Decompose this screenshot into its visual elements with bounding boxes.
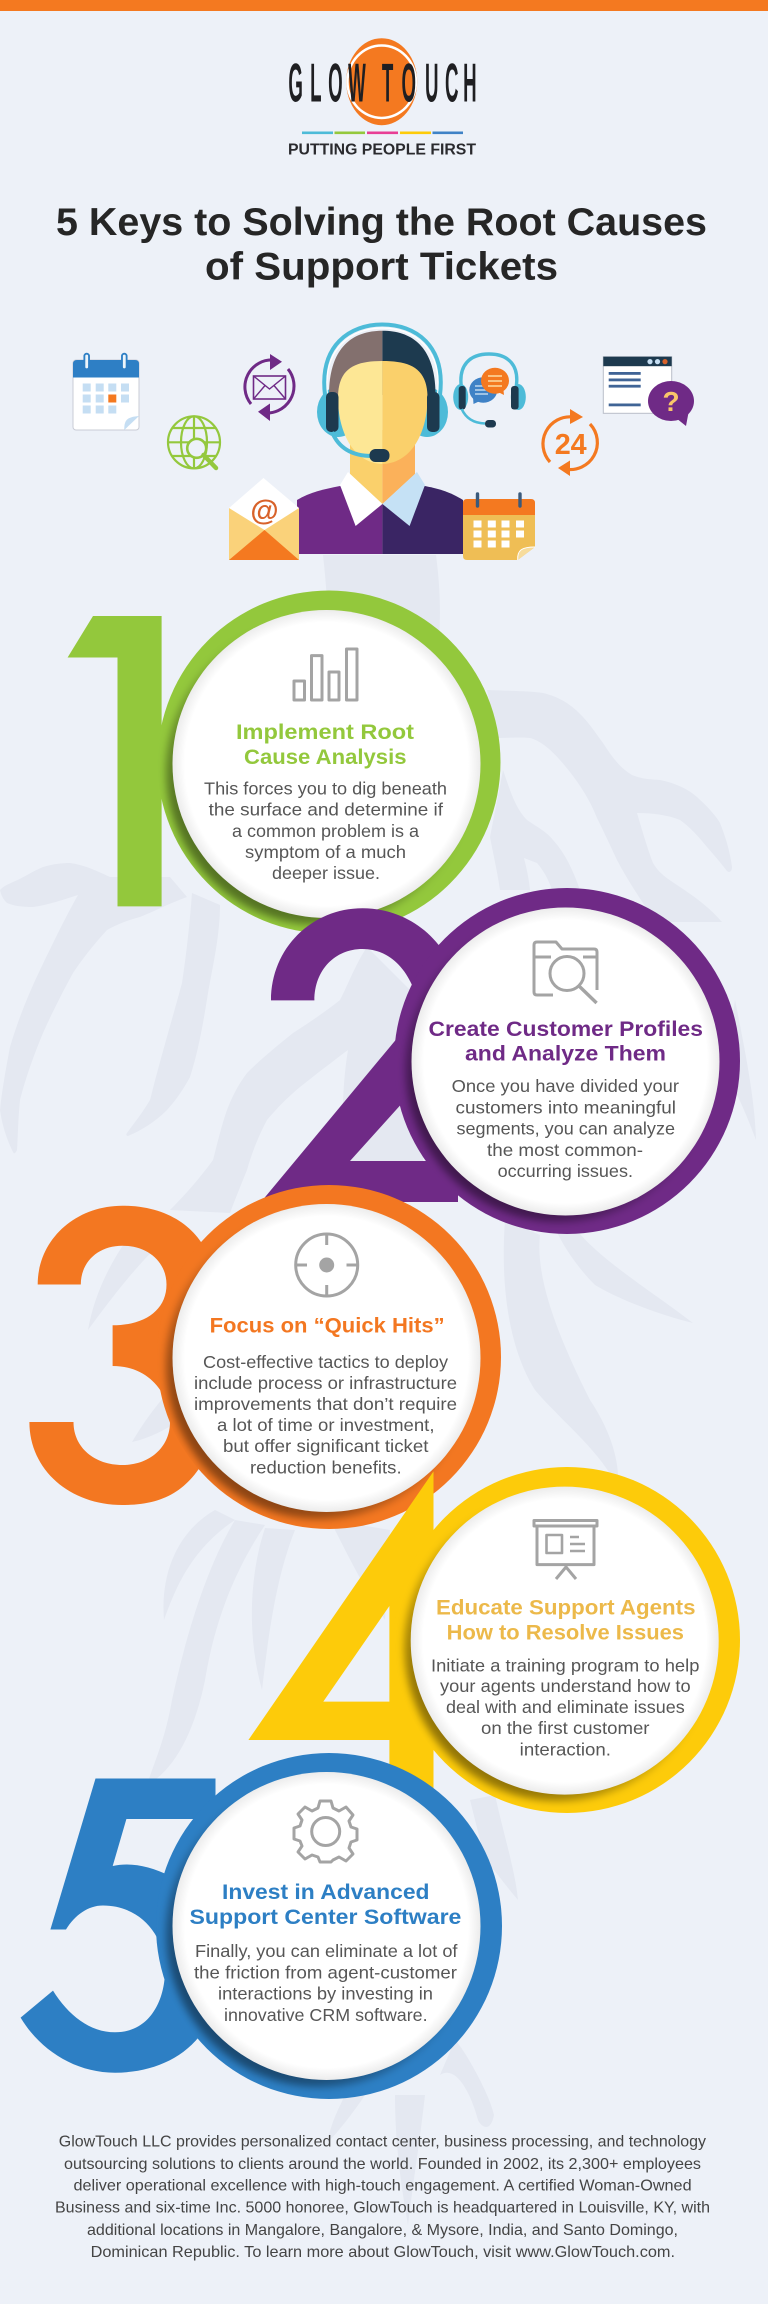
big numeral 1 bbox=[68, 616, 162, 906]
footer text: GlowTouch LLC provides personalized contact center, business processing, and technology bbox=[59, 2134, 706, 2150]
footer text bbox=[55, 2134, 710, 2261]
heading: Invest in Advanced bbox=[222, 1880, 430, 1904]
footer text: outsourcing solutions to clients around the world. Founded in 2002, its 2,300+ employees bbox=[64, 2156, 701, 2173]
big numeral 2 bbox=[261, 908, 470, 1202]
logo emblem bbox=[346, 38, 417, 125]
background roots illustration bbox=[0, 555, 756, 2225]
person with headset bbox=[297, 324, 463, 554]
icon: right calendar bbox=[463, 494, 535, 560]
body text: on the first customer bbox=[481, 1718, 650, 1738]
body text: customers into meaningful bbox=[456, 1098, 676, 1118]
footer text: Business and six-time Inc. 5000 honoree, GlowTouch is headquartered in Louisville, KY, with bbox=[55, 2200, 710, 2217]
logo wordmark: GLOWTOUCH bbox=[288, 52, 477, 114]
icon: headset with chat bubbles bbox=[453, 354, 526, 428]
tagline: PUTTING PEOPLE FIRST bbox=[288, 141, 477, 158]
icon: envelope with at sign bbox=[229, 478, 299, 560]
body text: a lot of time or investment, bbox=[217, 1415, 434, 1435]
icon: browser window with question bubble bbox=[603, 357, 694, 426]
body text: Once you have divided your bbox=[452, 1076, 679, 1096]
body text: include process or infrastructure bbox=[194, 1373, 457, 1393]
body text: Initiate a training program to help bbox=[431, 1655, 699, 1675]
heading: Cause Analysis bbox=[244, 745, 407, 769]
title bbox=[56, 201, 707, 288]
body text: interaction. bbox=[520, 1740, 611, 1760]
body text: deal with and eliminate issues bbox=[446, 1697, 685, 1717]
big numeral 3 bbox=[29, 1206, 210, 1505]
body text bbox=[204, 779, 447, 883]
icon: browser window with question bubble: ? bbox=[662, 386, 680, 417]
footer text: Dominican Republic. To learn more about GlowTouch, visit www.GlowTouch.com. bbox=[91, 2244, 675, 2261]
panel: step 3 bbox=[157, 1185, 501, 1529]
body text: the most common- bbox=[487, 1140, 643, 1160]
heading: and Analyze Them bbox=[465, 1042, 666, 1066]
heading bbox=[190, 1880, 461, 1929]
title: 5 Keys to Solving the Root Causes bbox=[56, 201, 707, 244]
heading: Focus on “Quick Hits” bbox=[210, 1314, 445, 1338]
body text bbox=[194, 1352, 457, 1478]
title: of Support Tickets bbox=[205, 245, 558, 288]
body text: the surface and determine if bbox=[209, 800, 443, 820]
footer text: additional locations in Mangalore, Bangalore, & Mysore, India, and Santo Domingo, bbox=[87, 2222, 678, 2239]
logo bbox=[288, 38, 477, 158]
icon: gear bbox=[294, 1801, 357, 1862]
heading: Implement Root bbox=[236, 720, 414, 744]
body text: the friction from agent-customer bbox=[194, 1962, 457, 1982]
heading: Support Center Software bbox=[190, 1905, 461, 1929]
heading bbox=[428, 1017, 703, 1066]
body text: innovative CRM software. bbox=[224, 2005, 428, 2025]
icon: envelope with at sign: @ bbox=[250, 495, 279, 527]
body text bbox=[431, 1655, 699, 1760]
panel: step 4 bbox=[394, 1467, 740, 1813]
body text: improvements that don’t require bbox=[194, 1394, 457, 1414]
body text: a common problem is a bbox=[232, 821, 419, 841]
body text: This forces you to dig beneath bbox=[204, 779, 447, 799]
icon: folder with magnifier bbox=[534, 942, 597, 1003]
body text: your agents understand how to bbox=[440, 1676, 691, 1696]
icon: bar chart bbox=[294, 649, 357, 700]
icon: presentation board bbox=[534, 1520, 597, 1579]
icon: email cycle bbox=[245, 354, 294, 421]
logo color bars bbox=[302, 132, 463, 134]
body text bbox=[194, 1941, 458, 2025]
icon: 24-hour cycle: 24 bbox=[555, 429, 587, 461]
body text: interactions by investing in bbox=[218, 1984, 433, 2004]
top orange bar bbox=[0, 0, 768, 11]
body text: segments, you can analyze bbox=[456, 1119, 675, 1139]
body text: deeper issue. bbox=[272, 863, 380, 883]
icon: target bbox=[296, 1234, 358, 1296]
heading: Educate Support Agents bbox=[436, 1595, 696, 1619]
big numeral 4 bbox=[248, 1471, 480, 1790]
body text: Finally, you can eliminate a lot of bbox=[195, 1941, 458, 1961]
panel: step 2 bbox=[394, 888, 740, 1234]
body text: symptom of a much bbox=[245, 842, 406, 862]
panel: step 5 bbox=[156, 1753, 502, 2099]
body text bbox=[452, 1076, 679, 1181]
icon: 24-hour cycle bbox=[543, 409, 597, 476]
body text: but offer significant ticket bbox=[223, 1436, 429, 1456]
icon: globe with magnifier bbox=[168, 416, 220, 468]
body text: reduction benefits. bbox=[250, 1458, 402, 1478]
footer text: deliver operational excellence with high-touch engagement. A certified Woman-Owned bbox=[74, 2178, 692, 2195]
body text: occurring issues. bbox=[498, 1161, 633, 1181]
heading bbox=[236, 720, 414, 769]
panel: step 1 bbox=[158, 590, 500, 934]
icon: left calendar bbox=[73, 356, 139, 430]
body text: Cost-effective tactics to deploy bbox=[203, 1352, 448, 1372]
heading: Create Customer Profiles bbox=[428, 1017, 703, 1041]
heading bbox=[436, 1595, 696, 1645]
big numeral 5 bbox=[21, 1778, 220, 2073]
heading: How to Resolve Issues bbox=[447, 1621, 684, 1645]
